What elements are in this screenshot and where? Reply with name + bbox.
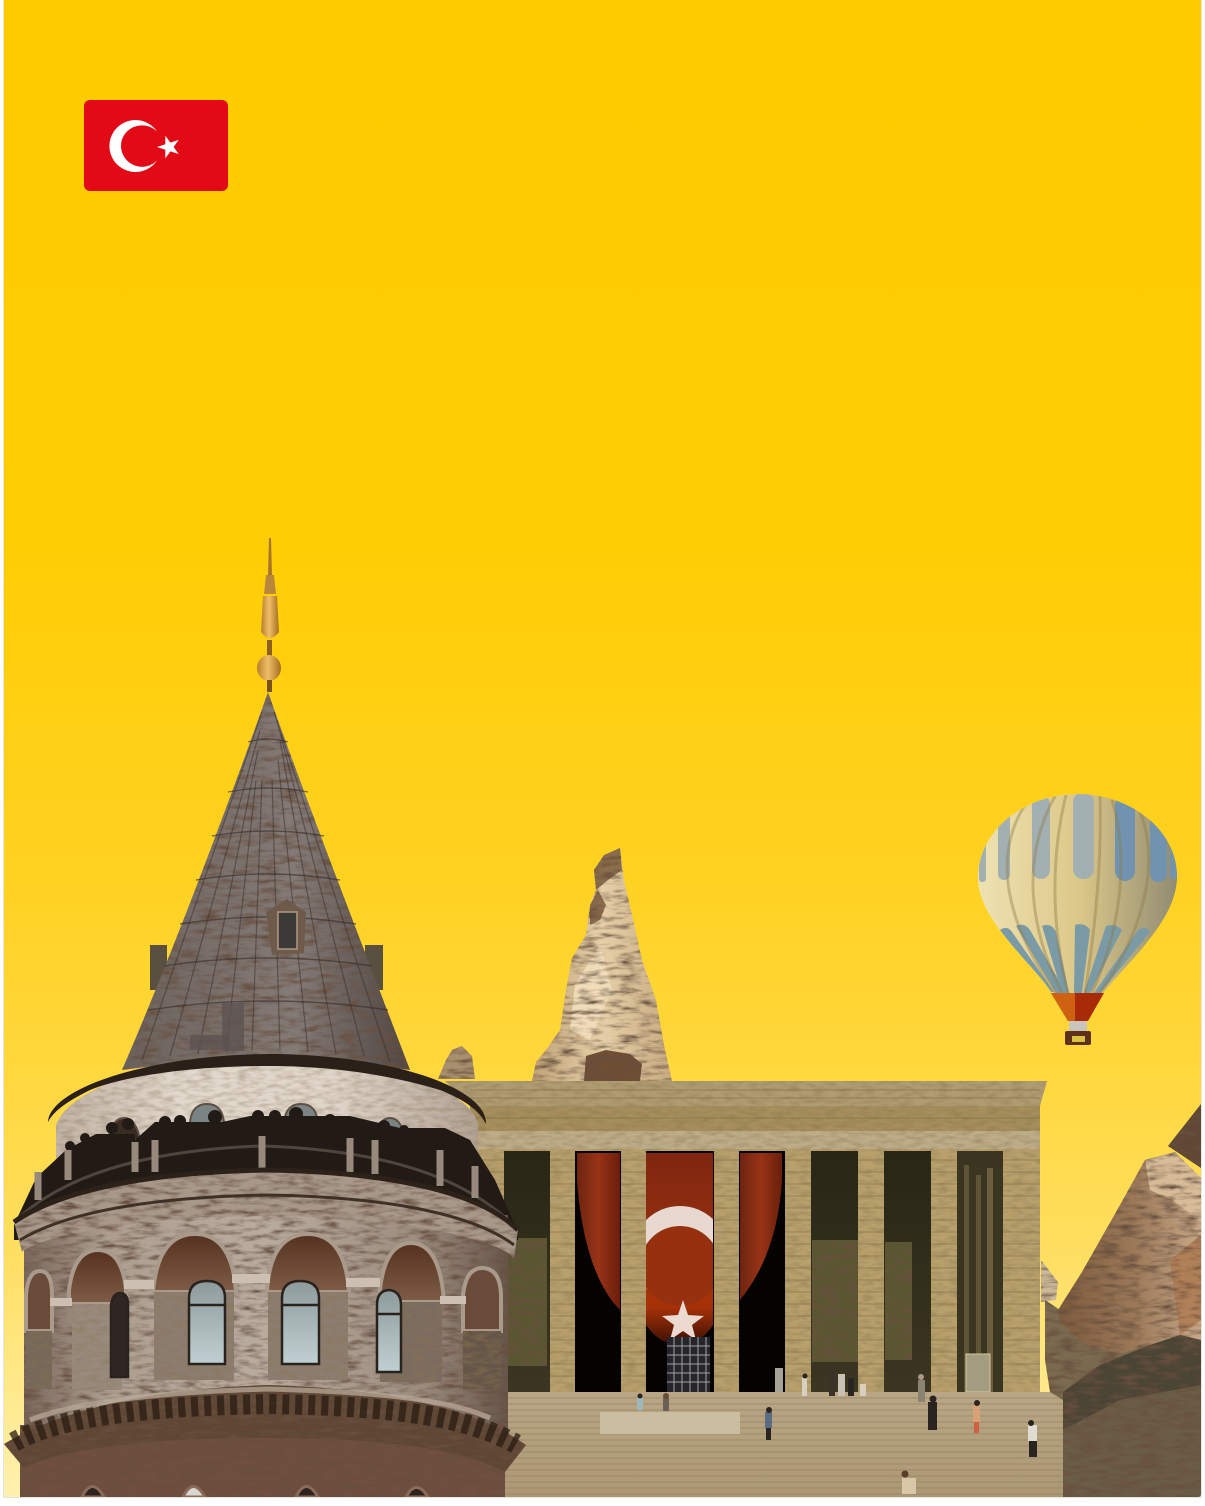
visitors [637, 1368, 1037, 1494]
side gate [966, 1354, 990, 1392]
tower windows [111, 1281, 401, 1377]
balloon envelope [975, 790, 1180, 995]
lower arched windows [82, 1486, 428, 1497]
observation arches [108, 1104, 406, 1142]
balloon ropes [1069, 1021, 1087, 1031]
balloon gore seams [1007, 795, 1149, 993]
balcony railing [14, 1136, 516, 1228]
illustration: Anitkabir mausoleum [445, 1081, 1066, 1497]
illustration: hot air balloon [975, 790, 1180, 1045]
arcade arches [26, 1234, 501, 1331]
mausoleum colonnade openings [504, 1151, 1003, 1392]
tower upper wall [56, 1066, 478, 1160]
balloon basket [1065, 1031, 1091, 1045]
tower lower cornice [4, 1385, 526, 1472]
arcade piers and capitals [50, 1274, 466, 1306]
balloon skirt [1051, 993, 1104, 1021]
mausoleum masonry courses [470, 1090, 1040, 1376]
dark peak [1168, 1104, 1201, 1168]
balcony crowd [14, 1107, 518, 1240]
tower spire finial [257, 538, 281, 692]
cornice corbels [14, 1404, 516, 1444]
illustration: Galata Tower [4, 538, 526, 1497]
lower dark rock [1063, 1335, 1201, 1430]
mausoleum stone facade [445, 1081, 1047, 1395]
balcony cornice [14, 1170, 518, 1258]
mausoleum steps [500, 1392, 1066, 1497]
tan rock [1058, 1152, 1201, 1354]
illustration: right side Cappadocia rocks [1041, 1104, 1201, 1497]
lattice door [667, 1337, 710, 1392]
rear grey slope [1045, 1300, 1150, 1400]
tower conical roof [122, 692, 410, 1070]
rear square turret blocks [150, 945, 383, 990]
Turkish banner on mausoleum [577, 1153, 782, 1345]
stone landing [600, 1412, 740, 1434]
inscription panels [505, 1238, 912, 1366]
small pale rock [1041, 1260, 1058, 1302]
tower arcade wall [24, 1215, 508, 1450]
tower eave [48, 1054, 486, 1124]
illustration: fairy chimney rock [532, 848, 672, 1081]
arch recess walls [26, 1292, 501, 1390]
roof dormer window [266, 899, 306, 955]
tower lower masonry [20, 1425, 505, 1497]
illustration: small rock [438, 1046, 475, 1079]
icon: Turkish flag [84, 100, 228, 191]
balloon blue panels [979, 792, 1094, 882]
